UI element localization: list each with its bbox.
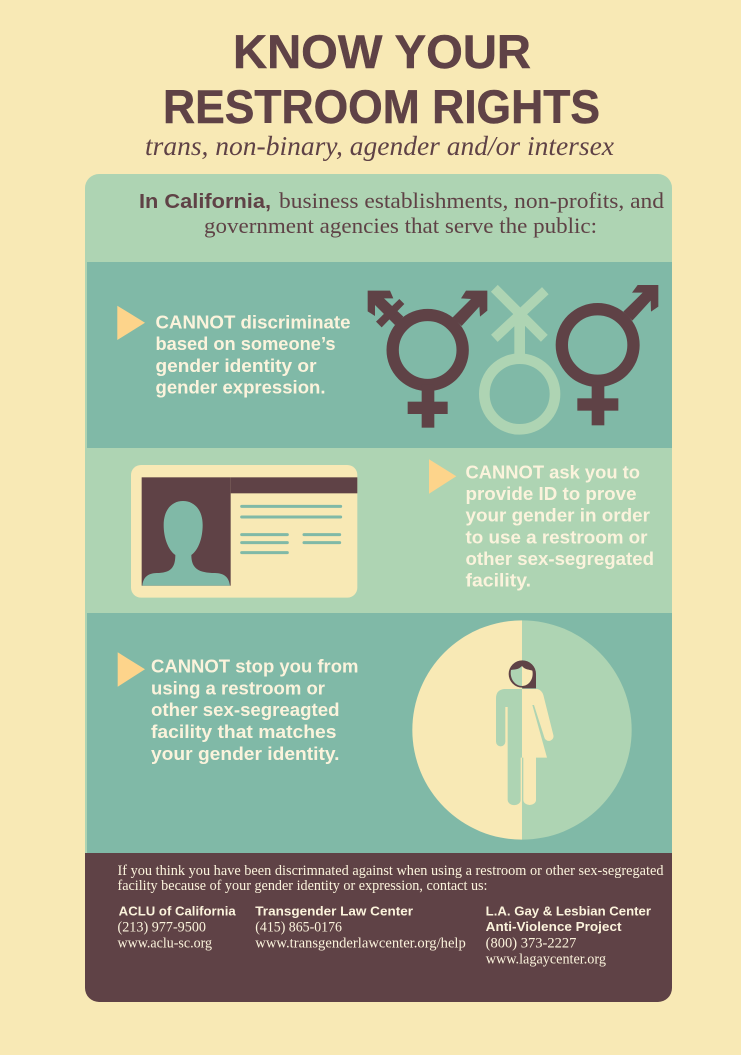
text block: CANNOT ask you to — [466, 462, 640, 482]
contact: Transgender Law Center — [255, 904, 466, 951]
contact: Transgender Law Center: www.transgenderlawcenter.org/help — [255, 935, 466, 951]
hair — [509, 660, 536, 688]
text block: CANNOT stop you from — [151, 656, 358, 677]
text block: other sex-segregated — [466, 548, 654, 569]
contact: LA Gay and Lesbian Center — [486, 904, 651, 967]
right half body — [522, 689, 553, 805]
contact: LA Gay and Lesbian Center: L.A. Gay & Lesbian Center — [486, 904, 651, 919]
text block: your gender identity. — [151, 743, 340, 764]
icon: ID card — [131, 465, 357, 598]
text block — [156, 312, 350, 398]
panel: cannot discriminate — [87, 262, 672, 448]
text block: gender identity or — [156, 355, 316, 376]
left half body — [496, 689, 522, 805]
contact: ACLU — [118, 904, 236, 951]
title: KNOW YOUR — [233, 25, 531, 78]
text block: to use a restroom or — [466, 526, 648, 547]
icon: gender symbols — [368, 285, 658, 429]
contact: LA Gay and Lesbian Center: Anti-Violence Project — [486, 919, 622, 934]
icon: transgender symbol — [368, 291, 487, 428]
contact: ACLU: ACLU of California — [119, 904, 236, 919]
contact: Transgender Law Center: (415) 865-0176 — [255, 920, 342, 936]
text block: facility that matches — [151, 721, 336, 742]
panel: cannot ask for ID — [87, 448, 672, 613]
icon: intersex symbol — [562, 285, 658, 425]
silhouette — [142, 501, 230, 586]
text block: gender expression. — [156, 376, 326, 398]
text block — [151, 656, 358, 764]
contact intro: facility because of your gender identity or expression, contact us: — [118, 878, 488, 894]
arrow bullet — [117, 306, 145, 340]
contact: ACLU: (213) 977-9500 — [118, 920, 206, 936]
face — [511, 666, 522, 686]
figure — [496, 660, 553, 805]
panel: contact footer — [85, 853, 672, 1002]
subtitle: trans, non-binary, agender and/or intersex — [145, 131, 614, 161]
contact: Transgender Law Center: Transgender Law Center — [255, 904, 413, 919]
intro text: business establishments, non-profits, and — [279, 188, 664, 213]
title: RESTROOM RIGHTS — [163, 80, 600, 133]
icon: split circle with figure — [412, 620, 632, 840]
title — [163, 25, 600, 133]
intro text: In California, — [139, 191, 271, 213]
text lines — [242, 506, 341, 553]
text block: using a restroom or — [151, 677, 325, 698]
contact: ACLU: www.aclu-sc.org — [118, 935, 212, 951]
text block: CANNOT discriminate — [156, 312, 350, 332]
panel: cannot stop you — [87, 613, 672, 853]
intro text: government agencies that serve the public: — [204, 213, 597, 238]
contact: LA Gay and Lesbian Center: (800) 373-2227 — [486, 936, 576, 952]
intro text — [139, 188, 664, 238]
arrow bullet — [118, 652, 145, 687]
text block: other sex-segreagted — [151, 699, 340, 720]
text block: based on someone’s — [156, 333, 336, 354]
icon: non-binary symbol — [484, 288, 555, 429]
contact intro — [118, 863, 664, 894]
contact: LA Gay and Lesbian Center: www.lagaycenter.org — [486, 951, 606, 967]
contact intro: If you think you have been discrimnated against when using a restroom or other sex-segregated — [118, 863, 664, 879]
text block: your gender in order — [466, 505, 650, 526]
text block: provide ID to prove — [466, 483, 636, 504]
panel: intro — [85, 174, 672, 853]
text block — [466, 462, 654, 591]
arrow bullet — [429, 459, 456, 494]
text block: facility. — [466, 570, 531, 591]
